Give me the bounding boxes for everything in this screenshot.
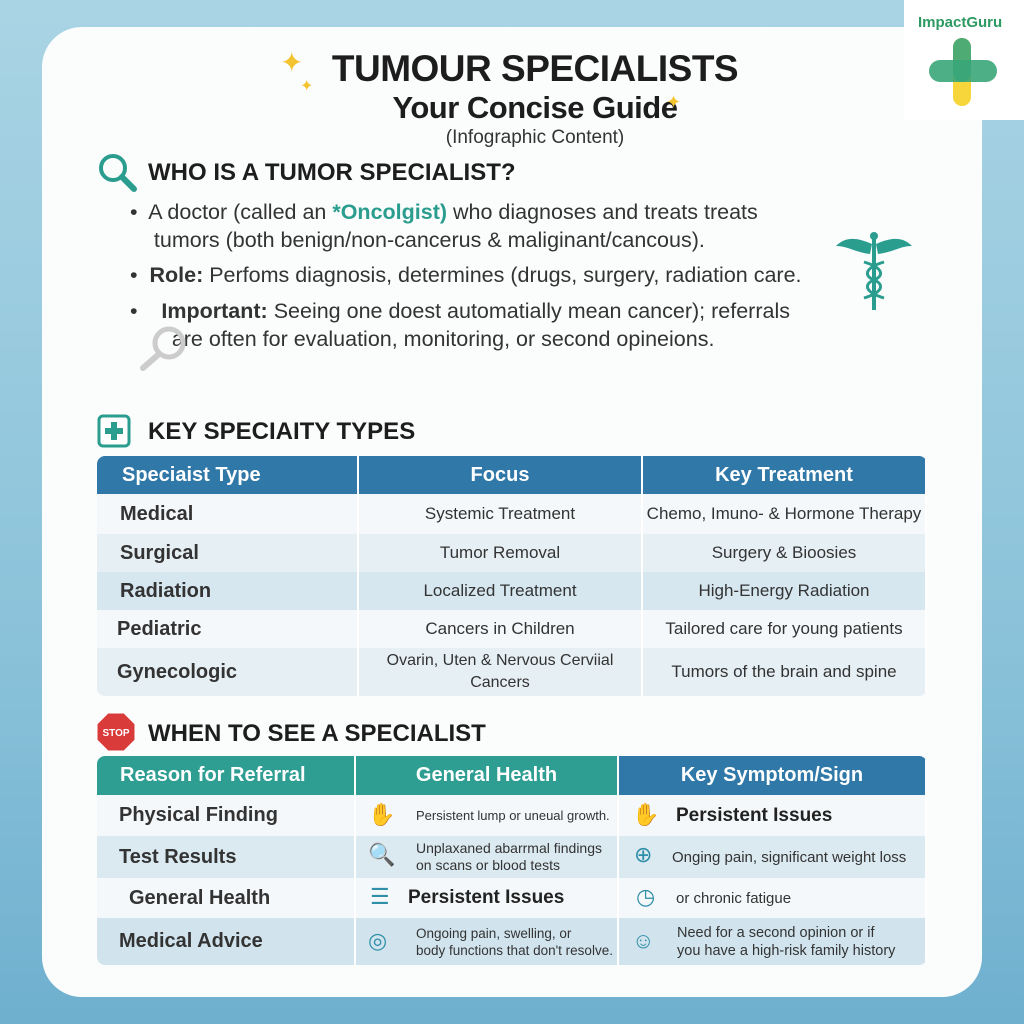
bullets: • Role: Perfoms diagnosis, determines (drugs, surgery, radiation care.: [130, 263, 802, 287]
heading: who: WHO IS A TUMOR SPECIALIST?: [148, 159, 516, 186]
icon: magnifier: [99, 154, 137, 192]
icons: referral rows: [368, 802, 659, 953]
logo cross: [929, 38, 997, 106]
table: referral: Ongoing pain, swelling, or: [416, 926, 571, 940]
table: specialty types: Systemic Treatment: [425, 504, 575, 523]
table: specialty types: Localized Treatment: [423, 581, 577, 600]
table: referral: Physical Finding: [119, 804, 278, 826]
table: specialty types: Tumor Removal: [440, 543, 560, 562]
icon: sparkles: ✦: [280, 47, 303, 78]
table: referral: Key Symptom/Sign: [681, 764, 863, 786]
table: specialty types: Pediatric: [117, 618, 201, 640]
table: specialty types: Surgical: [120, 542, 199, 564]
table: specialty types: Tumors of the brain and spine: [671, 662, 897, 681]
table: specialty types: Chemo, Imuno- & Hormone Therapy: [647, 504, 921, 523]
bullets: [130, 200, 802, 351]
table: referral: or chronic fatigue: [676, 890, 791, 906]
table: referral: you have a high-risk family history: [677, 942, 895, 958]
table: referral: on scans or blood tests: [416, 857, 560, 873]
icons: referral rows: ✋: [632, 802, 659, 827]
icons: referral rows: 🔍: [368, 842, 395, 867]
table: referral: General Health: [416, 764, 557, 786]
icon: caduceus: [836, 232, 912, 310]
table: specialty types: Medical: [120, 502, 193, 524]
table: referral: [97, 756, 926, 965]
table: referral: Onging pain, significant weight loss: [672, 848, 906, 866]
icons: referral rows: ☺: [632, 928, 654, 953]
table: referral: General Health: [129, 886, 270, 908]
icon: faded magnifier: [140, 326, 186, 371]
icons: referral rows: ✋: [368, 802, 395, 827]
table: specialty types: Focus: [471, 464, 529, 486]
table: specialty types: High-Energy Radiation: [698, 581, 870, 600]
table: specialty types: Ovarin, Uten & Nervous Cerviial: [387, 652, 613, 669]
table: referral: Test Results: [119, 846, 236, 868]
title: TUMOUR SPECIALISTS: [332, 48, 738, 89]
table: referral: Medical Advice: [119, 930, 263, 952]
table: specialty types: Cancers: [470, 674, 530, 691]
table: referral: Unplaxaned abarrmal findings: [416, 840, 602, 856]
title: Your Concise Guide: [392, 90, 677, 125]
icons: referral rows: ☰: [370, 884, 390, 909]
title: [332, 48, 738, 148]
title: (Infographic Content): [446, 127, 624, 148]
bullets: tumors (both benign/non-cancerus & maliginant/cancous).: [154, 228, 705, 252]
table: specialty types: Tailored care for young patients: [665, 619, 903, 638]
text: ✦: [300, 78, 313, 95]
icons: referral rows: ⊕: [634, 842, 652, 867]
icon: plus box: [98, 414, 130, 448]
icons: referral rows: ◎: [368, 928, 387, 953]
icon: stop sign: [98, 714, 134, 750]
table: specialty types: Key Treatment: [715, 464, 853, 486]
table: referral: Persistent Issues: [676, 804, 832, 826]
table: referral: Persistent Issues: [408, 887, 564, 908]
table: referral: Need for a second opinion or if: [677, 924, 874, 940]
table: specialty types: Cancers in Children: [425, 619, 575, 638]
table: referral: body functions that don't resolve.: [416, 942, 613, 958]
bullets: • A doctor (called an *Oncolgist) who diagnoses and treats treats: [130, 200, 758, 224]
heading: specialty: KEY SPECIAITY TYPES: [148, 418, 415, 445]
bullets: • Important: Seeing one doest automatially mean cancer); referrals: [130, 299, 790, 323]
logo box: [904, 0, 1024, 120]
table: specialty types: Surgery & Bioosies: [712, 543, 856, 562]
logo text: ImpactGuru: [918, 14, 1002, 31]
table: specialty types: [97, 456, 926, 696]
heading: when: WHEN TO SEE A SPECIALIST: [148, 720, 486, 747]
table: referral: Persistent lump or uneual growth.: [416, 808, 610, 823]
text: ✦: [666, 92, 681, 112]
table: referral: Reason for Referral: [120, 764, 306, 786]
table: specialty types: Speciaist Type: [122, 464, 261, 486]
icons: referral rows: ◷: [636, 884, 655, 909]
bullets: are often for evaluation, monitoring, or second opineions.: [172, 327, 714, 351]
table: specialty types: Radiation: [120, 580, 211, 602]
table: specialty types: Gynecologic: [117, 660, 237, 682]
icon: stop sign: STOP: [102, 728, 130, 739]
